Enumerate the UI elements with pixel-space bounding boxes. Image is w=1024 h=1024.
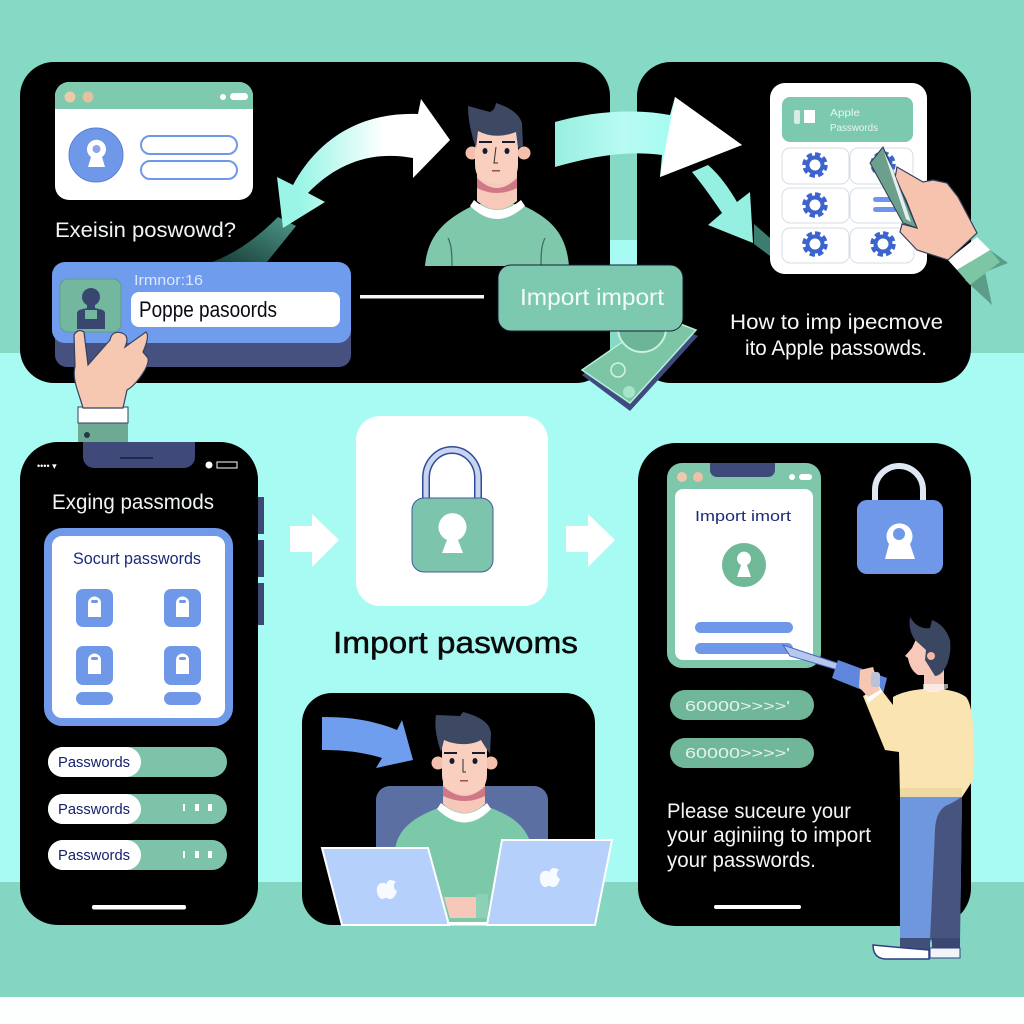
hand on settings card bbox=[870, 147, 1008, 305]
person: green shirt bbox=[425, 103, 569, 266]
phone screen: Import imort bbox=[695, 508, 792, 525]
panel: right phone bbox=[638, 443, 971, 926]
home bar bbox=[92, 905, 186, 910]
padlock bbox=[857, 466, 943, 574]
phone: existing passwords bbox=[20, 442, 264, 925]
tilted phone with banknote screen bbox=[582, 304, 698, 411]
home bar bbox=[714, 905, 801, 909]
secure passwords card: Socurt passwords bbox=[73, 549, 201, 568]
heading: import passwords: Import paswoms bbox=[333, 625, 578, 660]
caption: How to imp ipecmove bbox=[730, 311, 943, 334]
notch bbox=[83, 442, 195, 468]
instructions bbox=[667, 800, 871, 872]
blue arrow bbox=[322, 717, 413, 768]
key bbox=[783, 645, 887, 698]
heading: Exging passmods bbox=[52, 491, 214, 514]
caption: existing password: Exeisin poswowd? bbox=[55, 219, 236, 242]
import button: Import import bbox=[520, 284, 665, 310]
panel: person at laptops bbox=[302, 693, 612, 926]
person with key bbox=[859, 617, 974, 959]
settings card bbox=[770, 83, 927, 274]
instructions: Please suceure your bbox=[667, 800, 851, 823]
code pills: 60000>>>>' bbox=[685, 745, 790, 762]
hand tapping lock bbox=[74, 331, 148, 444]
arrow: lock to phone bbox=[566, 514, 615, 567]
secure passwords card bbox=[48, 532, 229, 722]
blue import bar: Irmnor:16 bbox=[134, 272, 203, 289]
status bar: •••• ▾ bbox=[37, 461, 57, 471]
instructions: your passwords. bbox=[667, 849, 816, 872]
legs bbox=[900, 797, 962, 942]
code pills bbox=[670, 690, 814, 768]
password rows: Passwords bbox=[58, 847, 130, 864]
blue import bar bbox=[52, 262, 351, 367]
import button bbox=[498, 265, 683, 331]
settings card: Passwords bbox=[830, 123, 878, 134]
blue import bar: Poppe pasoords bbox=[139, 297, 277, 322]
arrow down to card bbox=[692, 165, 753, 243]
laptop right bbox=[487, 840, 612, 925]
password rows: Passwords bbox=[58, 754, 130, 771]
hand holding key bbox=[859, 667, 880, 697]
panel: top right bbox=[555, 62, 971, 383]
laptop left bbox=[322, 848, 449, 925]
panel: top left bbox=[20, 62, 610, 383]
shoes bbox=[873, 945, 929, 959]
settings card: Apple bbox=[830, 108, 861, 119]
phone screen bbox=[667, 463, 821, 668]
code pills: 60000>>>>' bbox=[685, 698, 790, 715]
lock card bbox=[356, 416, 548, 606]
connector line bbox=[360, 295, 484, 298]
sweater bbox=[863, 688, 974, 797]
sleeve bbox=[78, 422, 128, 444]
panel: top right: ito Apple passowds. bbox=[745, 337, 927, 360]
password rows: Passwords bbox=[58, 801, 130, 818]
arrow: phone to lock bbox=[290, 514, 339, 567]
instructions: your aginiing to import bbox=[667, 824, 871, 847]
hand bbox=[444, 897, 476, 918]
chair bbox=[376, 786, 548, 850]
password rows bbox=[48, 747, 227, 870]
browser window card bbox=[55, 82, 253, 200]
arrow tail shadow bbox=[212, 217, 296, 262]
curved arrow to card bbox=[555, 97, 742, 177]
neck and head bbox=[924, 664, 944, 691]
torso bbox=[395, 806, 532, 925]
curved double arrow bbox=[277, 99, 450, 228]
